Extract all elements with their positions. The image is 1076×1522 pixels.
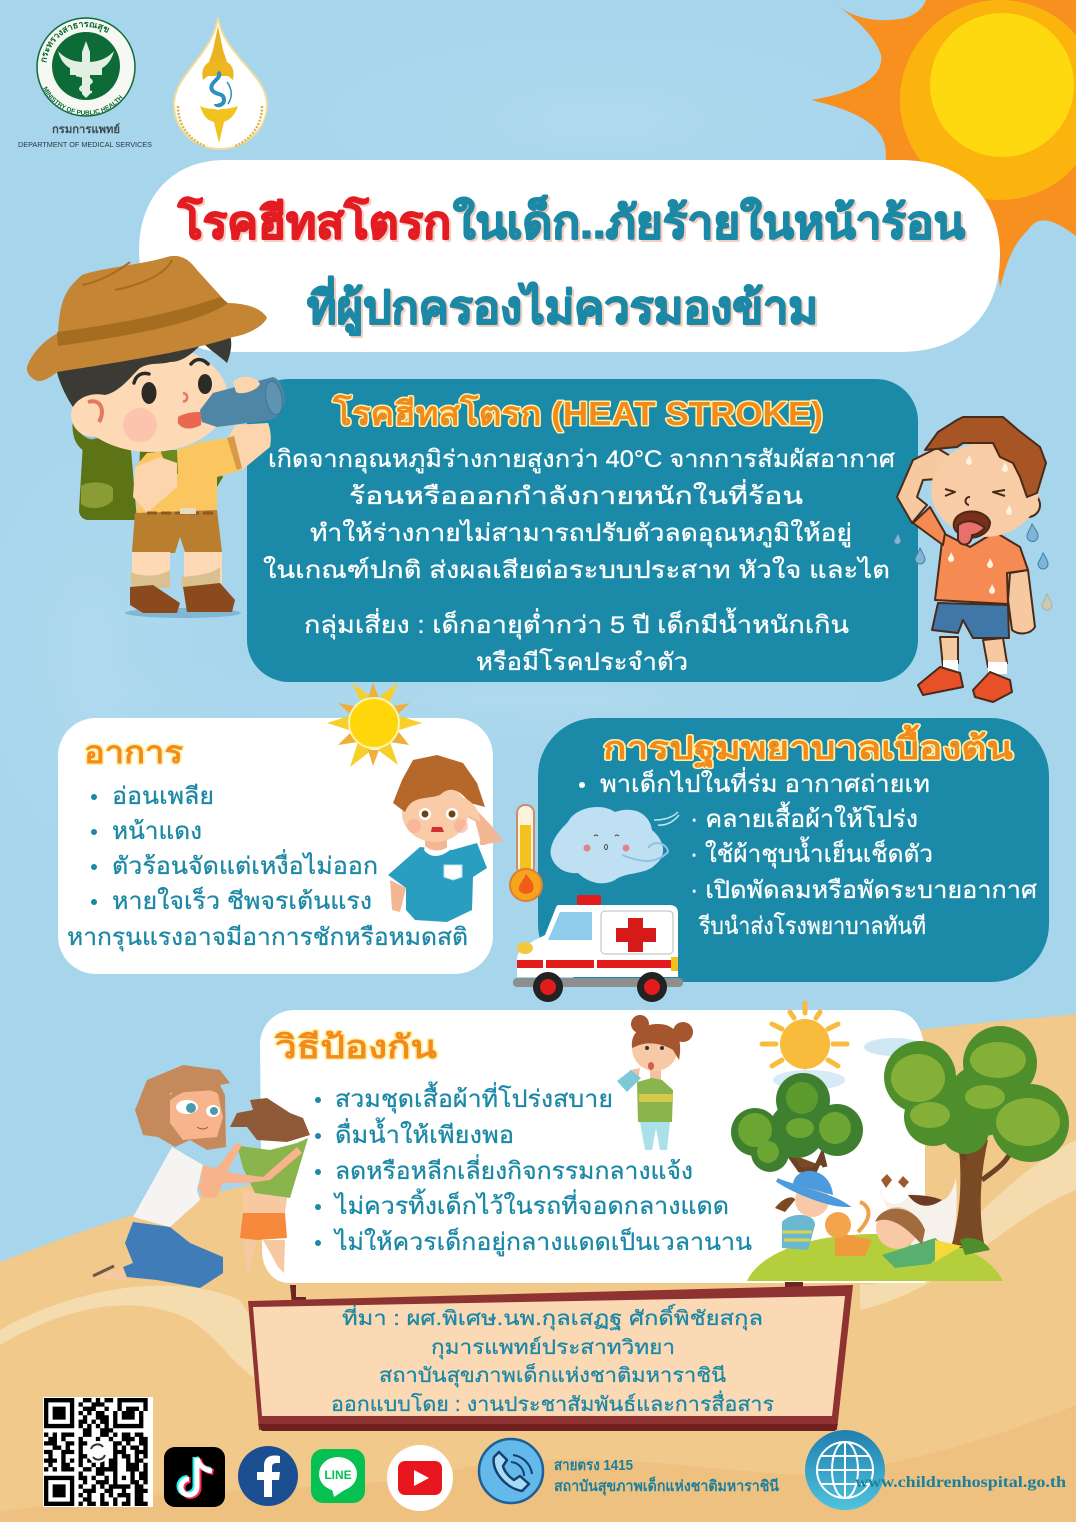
panel: heat stroke definition: กลุ่มเสี่ยง : เด็กอายุต่ำกว่า 5 ปี เด็กมีน้ำหนักเกิน — [304, 607, 849, 640]
website address: www.childrenhospital.go.th — [855, 1474, 1066, 1491]
panel: first aid: · คลายเสื้อผ้าให้โปร่ง — [690, 801, 918, 833]
icon: cloud blowing wind — [551, 807, 679, 883]
title line 1: ในเด็ก..ภัยร้ายในหน้าร้อน — [453, 195, 965, 248]
title banner — [139, 160, 1000, 352]
panel: first aid: · ใช้ผ้าชุบน้ำเย็นเช็ดตัว — [690, 836, 933, 869]
panel: first aid: · เปิดพัดลมหรือพัดระบายอากาศ — [690, 877, 1037, 904]
QR code — [43, 1397, 153, 1507]
panel: source credit signboard: กุมารแพทย์ประสาทวิทยา — [431, 1336, 675, 1360]
panel: source credit signboard: สถาบันสุขภาพเด็กแห่งชาติมหาราชินี — [379, 1362, 726, 1388]
panel: symptoms: ตัวร้อนจัดแต่เหงื่อไม่ออก — [112, 849, 378, 880]
logo: Ministry of Public Health — [18, 17, 152, 149]
icon: small sun — [327, 683, 422, 767]
icon: YouTube — [387, 1445, 453, 1511]
panel: symptoms: หายใจเร็ว ชีพจรเต้นแรง — [112, 886, 372, 915]
panel: prevention — [260, 1010, 925, 1283]
panel: symptoms: อ่อนเพลีย — [112, 783, 214, 810]
panel: source credit signboard: ออกแบบโดย : งานประชาสัมพันธ์และการสื่อสาร — [331, 1390, 774, 1416]
icon: Facebook — [238, 1446, 298, 1506]
panel: symptoms: หน้าแดง — [112, 818, 202, 845]
panel: source credit signboard: ที่มา : ผศ.พิเศษ.นพ.กุลเสฏฐ ศักดิ์พิชัยสกุล — [342, 1303, 763, 1331]
title line 1: โรคฮีทสโตรก — [177, 196, 451, 248]
heading: first aid: การปฐมพยาบาลเบื้องต้น — [603, 724, 1013, 769]
logo: hospital water drop emblem — [174, 18, 267, 149]
hotline text: สายตรง 1415 — [554, 1457, 633, 1474]
icon: TikTok — [164, 1447, 225, 1507]
heading: prevention: วิธีป้องกัน — [274, 1029, 437, 1065]
panel: prevention: สวมชุดเสื้อผ้าที่โปร่งสบาย — [335, 1081, 613, 1114]
logo: Ministry of Public Health: MINISTRY OF PUBLIC HEALTH — [43, 86, 123, 115]
title line 2: ที่ผู้ปกครองไม่ควรมองข้าม — [307, 276, 818, 336]
illustration: trees, children and pets on grass — [731, 1026, 1069, 1281]
panel: prevention: ลดหรือหลีกเลี่ยงกิจกรรมกลางแจ้ง — [335, 1154, 693, 1185]
panel: symptoms: หากรุนแรงอาจมีอาการชักหรือหมดสติ — [67, 924, 468, 952]
hotline text: สถาบันสุขภาพเด็กแห่งชาติมหาราชินี — [554, 1476, 780, 1496]
panel: prevention: ดื่มน้ำให้เพียงพอ — [335, 1117, 514, 1149]
panel: heat stroke definition: เกิดจากอุณหภูมิร่างกายสูงกว่า 40°C จากการสัมผัสอากาศ — [268, 446, 895, 474]
icon: LINE: LINE — [324, 1468, 352, 1482]
illustration: girl drinking water — [617, 1015, 693, 1150]
logo: Ministry of Public Health: กระทรวงสาธารณสุข — [41, 22, 110, 62]
panel: heat stroke definition: หรือมีโรคประจำตัว — [476, 648, 688, 676]
panel: heat stroke definition: ทำให้ร่างกายไม่สามารถปรับตัวลดอุณหภูมิให้อยู่ — [310, 519, 852, 548]
hotline text — [554, 1457, 780, 1496]
icon: hotline phone — [479, 1439, 543, 1503]
panel: heat stroke definition — [247, 379, 918, 682]
panel: first aid: รีบนำส่งโรงพยาบาลทันที — [698, 912, 926, 940]
panel: heat stroke definition: ในเกณฑ์ปกติ ส่งผลเสียต่อระบบประสาท หัวใจ และไต — [263, 556, 890, 584]
illustration: sweating boy with tongue out — [897, 417, 1046, 702]
illustration: mother lifting child's shirt — [93, 1065, 310, 1288]
logo: Ministry of Public Health: กรมการแพทย์ — [52, 123, 120, 136]
icon: website globe — [805, 1430, 885, 1510]
heading: heat stroke: โรคฮีทสโตรก (HEAT STROKE) — [332, 394, 823, 432]
logo: Ministry of Public Health: DEPARTMENT OF MEDICAL SERVICES — [18, 140, 152, 149]
icon: ambulance — [513, 895, 683, 1002]
illustration: sun over trees — [762, 1003, 924, 1090]
icon: LINE — [311, 1449, 365, 1503]
illustration: boy drinking with hat — [27, 256, 285, 618]
panel: source credit signboard — [248, 1282, 853, 1431]
icon: thermometer — [510, 805, 542, 901]
panel: first aid: พาเด็กไปในที่ร่ม อากาศถ่ายเท — [600, 767, 930, 798]
panel: heat stroke definition: ร้อนหรือออกกำลังกายหนักในที่ร้อน — [349, 479, 803, 510]
panel: prevention: ไม่ให้ควรเด็กอยู่กลางแดดเป็นเวลานาน — [333, 1227, 752, 1257]
sweat drops — [894, 455, 1052, 610]
heading: symptoms: อาการ — [84, 735, 183, 770]
illustration: boy with hand on forehead — [388, 755, 500, 922]
panel: first aid — [538, 718, 1049, 982]
sun — [811, 0, 1076, 288]
panel: prevention: ไม่ควรทิ้งเด็กไว้ในรถที่จอดกลางแดด — [333, 1188, 729, 1220]
panel: symptoms — [58, 718, 493, 974]
